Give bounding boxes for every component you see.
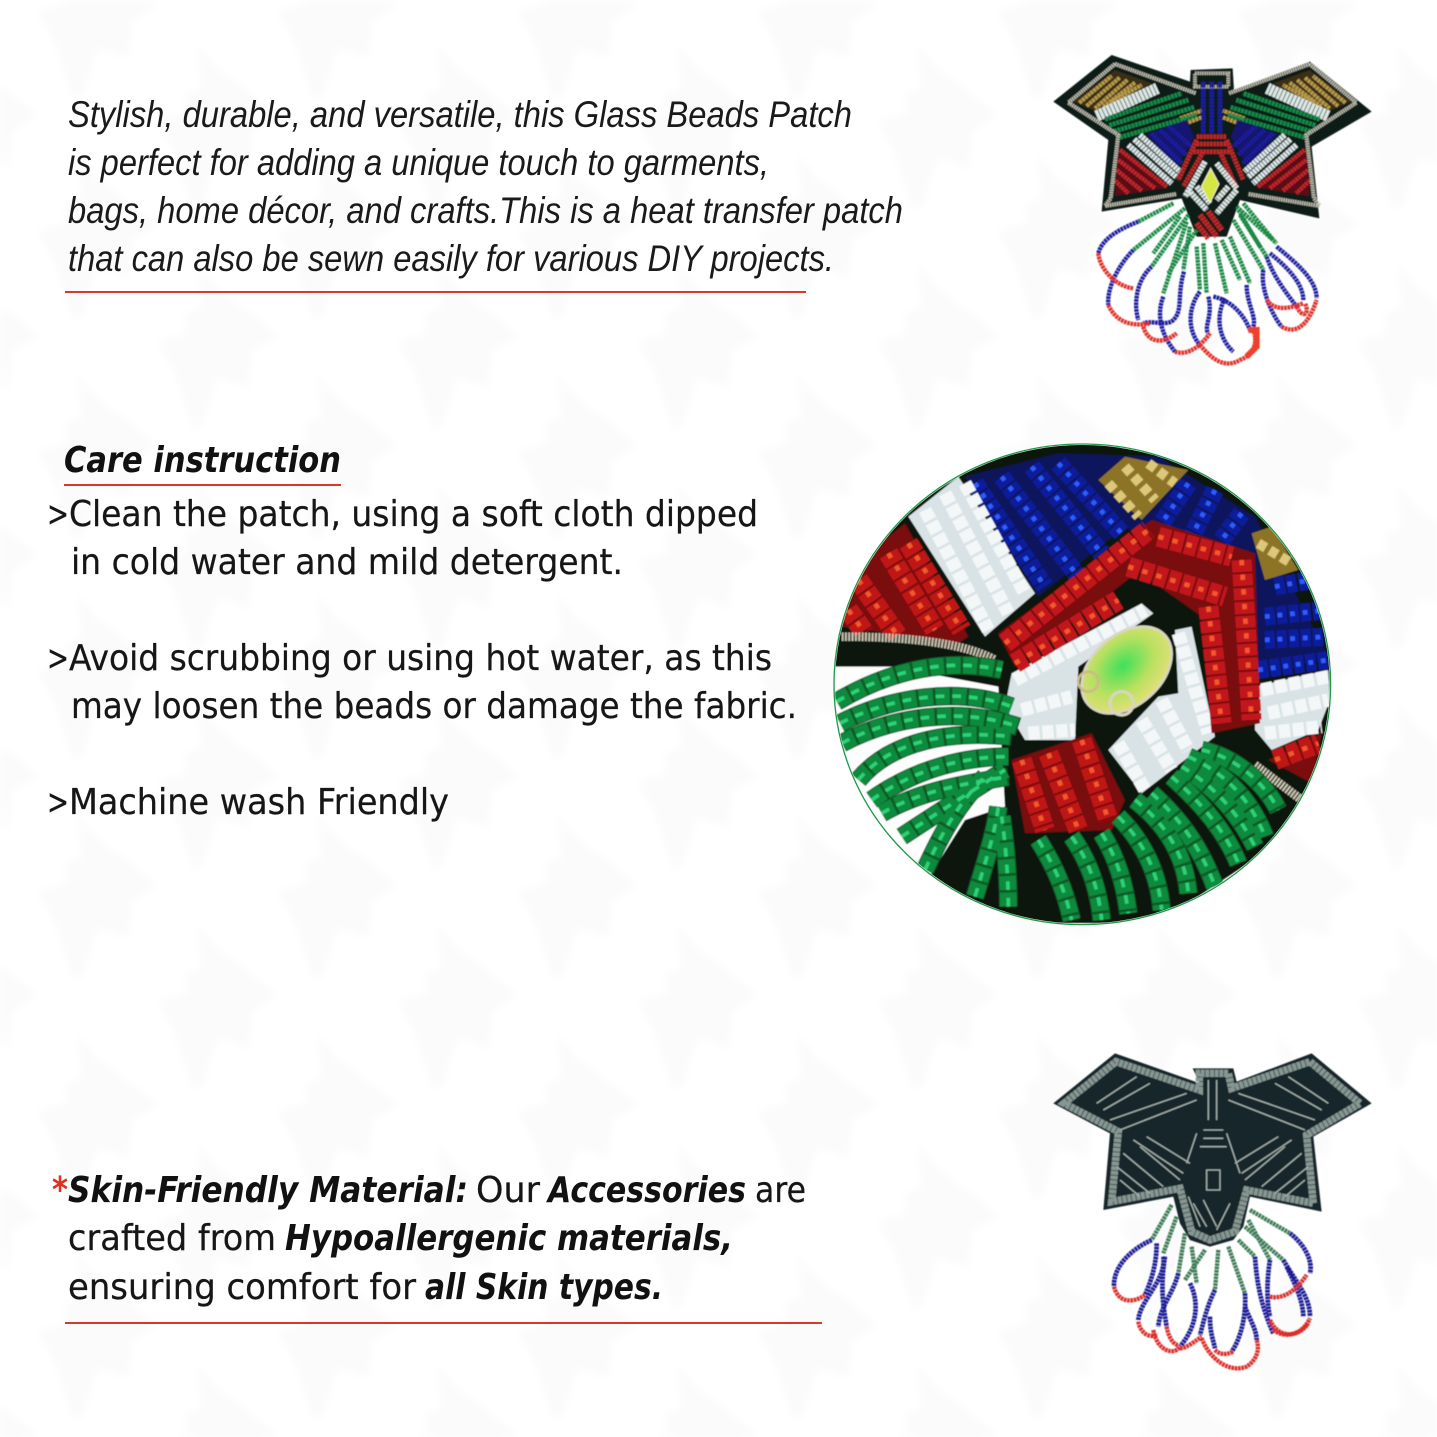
- icon: beaded patch back: [1053, 1053, 1372, 1368]
- care instructions list: may loosen the beads or damage the fabric.: [71, 686, 797, 727]
- skin-friendly note: Hypoallergenic materials,: [285, 1218, 733, 1259]
- skin-friendly note: [52, 1170, 806, 1308]
- intro paragraph: Stylish, durable, and versatile, this Glass Beads Patch: [68, 94, 852, 135]
- skin-friendly note: Our: [476, 1170, 540, 1211]
- care instructions list: >: [47, 782, 69, 823]
- icon: close-up circle of beads: [825, 440, 1345, 933]
- skin-friendly note: all Skin types.: [425, 1267, 663, 1308]
- intro paragraph: is perfect for adding a unique touch to garments,: [68, 142, 769, 183]
- gold beads: [1098, 457, 1298, 580]
- care instructions list: >: [47, 638, 69, 679]
- care instructions list: Avoid scrubbing or using hot water, as this: [69, 638, 772, 679]
- green beads: [837, 665, 1278, 920]
- care instruction heading: Care instruction: [64, 440, 341, 481]
- intro red underline: [65, 291, 806, 293]
- care instructions list: [47, 494, 797, 823]
- skin-friendly note: Accessories: [545, 1170, 746, 1211]
- skin-friendly note: Skin-Friendly Material:: [68, 1170, 468, 1211]
- red beads: [842, 520, 1322, 833]
- gem: [1076, 624, 1174, 718]
- base dark and white regions: [825, 440, 1345, 933]
- care instructions list: Machine wash Friendly: [69, 782, 449, 823]
- intro paragraph: that can also be sewn easily for various DIY projects.: [68, 238, 834, 279]
- care instructions list: >: [47, 494, 69, 535]
- icon: beaded patch front: [1053, 55, 1372, 363]
- white beads: [908, 477, 1330, 793]
- care instructions list: in cold water and mild detergent.: [71, 542, 623, 583]
- skin-friendly note: ensuring comfort for: [68, 1267, 416, 1308]
- care heading underline: [64, 484, 341, 486]
- silver threads: [835, 637, 1302, 800]
- skin note underline: [65, 1322, 822, 1324]
- skin-friendly note: crafted from: [68, 1218, 276, 1259]
- skin-friendly note: are: [755, 1170, 806, 1211]
- blue beads: [965, 453, 1328, 680]
- intro paragraph: [68, 94, 903, 279]
- intro paragraph: bags, home décor, and crafts.This is a heat transfer patch: [68, 190, 903, 231]
- care instructions list: Clean the patch, using a soft cloth dipped: [69, 494, 758, 535]
- skin-friendly note: *: [52, 1170, 68, 1211]
